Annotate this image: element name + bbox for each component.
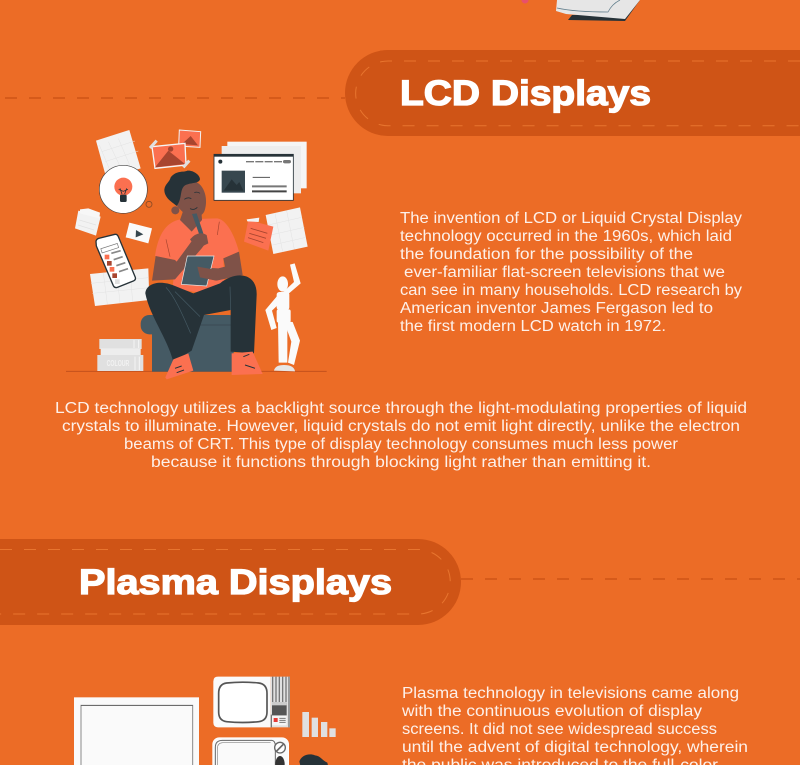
icon: retro TV with knobs — [213, 738, 289, 765]
text block: LCD history: the foundation for the possibility of the — [400, 246, 693, 263]
text block: how LCD works — [55, 400, 747, 471]
icon: smartphone — [96, 234, 135, 288]
illustration: stack of books: COLOUR — [107, 359, 129, 368]
panel: Plasma heading banner — [0, 539, 800, 625]
text block: Plasma history: until the advent of digital technology, wherein — [402, 739, 748, 756]
heading: LCD Displays: LCD Displays — [400, 74, 651, 113]
illustration: hair of figure — [299, 754, 328, 765]
icon: light bulb circle — [99, 165, 152, 213]
text block: how LCD works: crystals to illuminate. However, liquid crystals do not emit light directly, unlike the electron — [62, 418, 740, 435]
note: left paper — [75, 208, 101, 236]
text block: LCD history: can see in many households. LCD research by — [400, 282, 742, 299]
illustration: televisions — [74, 677, 336, 765]
text block: Plasma history — [401, 685, 748, 765]
icon: play card — [126, 223, 152, 243]
icon: large flat screen — [74, 697, 199, 765]
icon: photos — [150, 130, 201, 168]
text block: LCD history: The invention of LCD or Liquid Crystal Display — [400, 210, 742, 227]
shoes — [165, 353, 193, 379]
illustration: armchair — [141, 315, 237, 372]
text block: how LCD works: LCD technology utilizes a backlight source through the light-modulating properties of liquid — [55, 400, 747, 417]
text block: LCD history: the first modern LCD watch in 1972. — [400, 318, 666, 335]
illustration: man — [145, 171, 263, 379]
notebook — [181, 256, 214, 286]
note: bottom grid paper — [90, 268, 149, 306]
illustration: stack of books — [97, 339, 143, 371]
icon: browser window — [214, 142, 307, 200]
text block: LCD history: American inventor James Fergason led to — [400, 300, 713, 317]
note: red sticky note — [244, 218, 273, 251]
heading: Plasma Displays: Plasma Displays — [79, 563, 392, 602]
illustration: wooden mannequin — [265, 263, 301, 371]
note: right grid paper — [266, 207, 308, 254]
panel: LCD heading banner — [5, 50, 800, 136]
icon: book fragment at top — [522, 0, 640, 21]
text block: Plasma history: Plasma technology in televisions came along — [402, 685, 739, 702]
text block: how LCD works: because it functions through blocking light rather than emitting it. — [151, 454, 651, 471]
text block: LCD history: technology occurred in the 1960s, which laid — [400, 228, 732, 245]
note: top-left grid paper — [96, 130, 141, 179]
illustration: man thinking with notes — [66, 130, 327, 379]
text block: how LCD works: beams of CRT. This type of display technology consumes much less power — [124, 436, 678, 453]
text block: Plasma history: with the continuous evolution of display — [401, 703, 702, 720]
text block: Plasma history: screens. It did not see widespread success — [402, 721, 717, 738]
bar chart icon — [302, 712, 336, 737]
text block: LCD history — [400, 210, 742, 335]
icon: retro TV with dial panel — [213, 677, 290, 727]
text block: LCD history: ever-familiar flat-screen televisions that we — [404, 264, 725, 281]
